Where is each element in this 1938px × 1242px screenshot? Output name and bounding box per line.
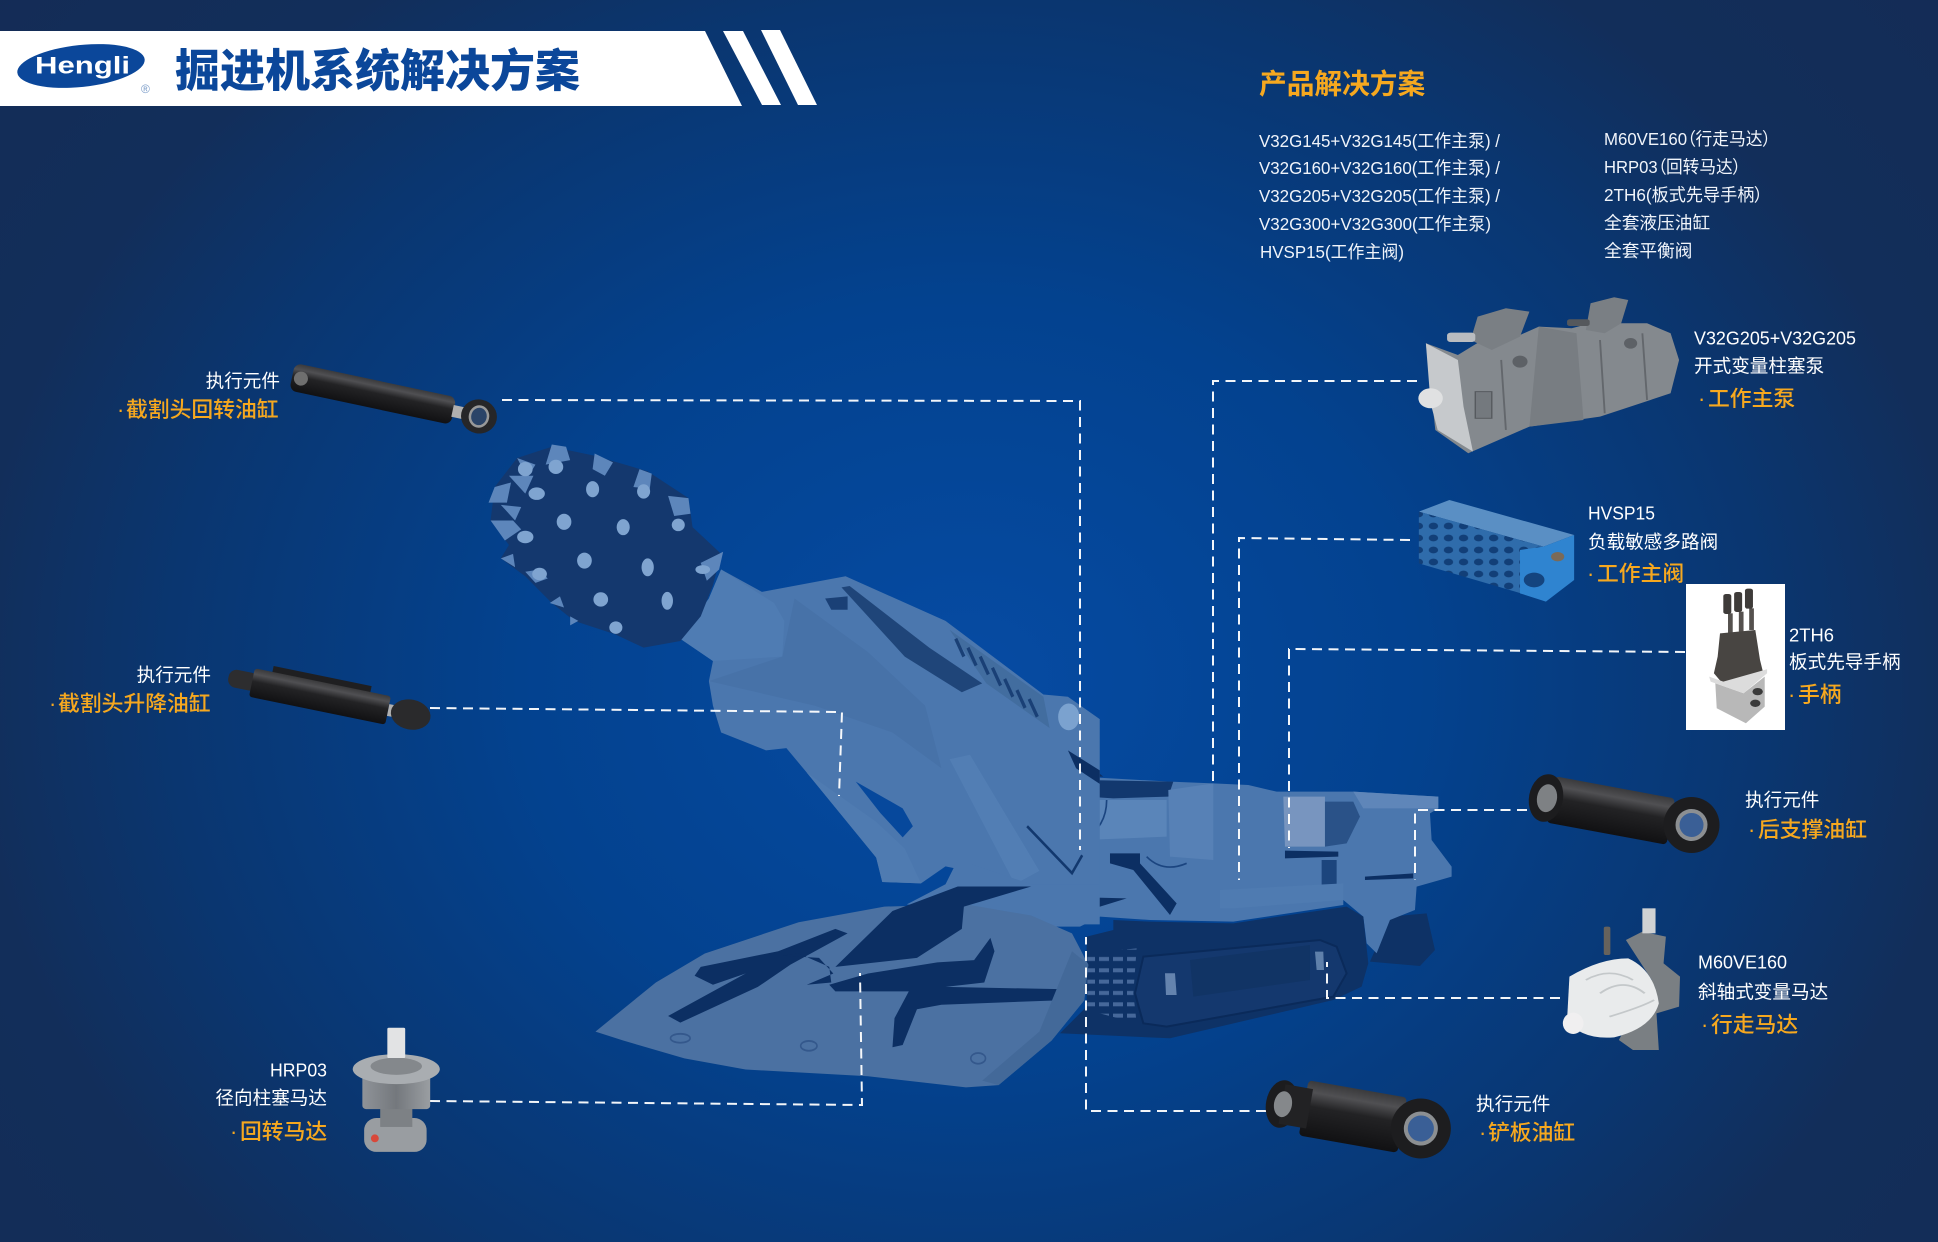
machine: boom [680,570,1100,924]
label: 手柄 [1798,682,1842,706]
label: · [1698,386,1705,410]
label [1745,790,1867,842]
header banner [0,30,817,106]
logo: Hengli: Hengli [35,52,130,80]
list: right column: M60VE160（行走马达） [1604,129,1771,149]
component: shovel plate cylinder [1261,1072,1575,1163]
list: right column: 2TH6(板式先导手柄） [1604,185,1763,205]
component: main pump V32G205 [1418,297,1856,453]
panel: product solutions [1259,68,1771,262]
list: right column: HRP03（回转马达） [1604,157,1741,177]
label: 工作主泵 [1708,386,1795,410]
machine: rear body and crawler [1000,750,1452,1038]
label: 径向柱塞马达 [215,1088,327,1108]
icon: twin piston pump [1418,297,1679,453]
list: left column [1259,131,1500,262]
component: rear support cylinder [1524,767,1867,858]
list: right column: 全套液压油缸 [1604,212,1710,233]
label [1694,328,1856,410]
logo: Hengli: ® [141,82,150,96]
logo: Hengli [15,38,150,96]
component: main valve HVSP15 [1419,500,1718,602]
label: HVSP15 [1588,502,1655,524]
label: 执行元件 [1745,790,1819,810]
label: 2TH6 [1789,624,1834,646]
label: 执行元件 [206,370,280,392]
label: 执行元件 [1476,1094,1550,1114]
label: · [1748,816,1755,842]
label: 回转马达 [240,1118,327,1144]
label: · [1587,560,1594,586]
machine: shovel plate [595,886,1088,1087]
list: right column: 全套平衡阀 [1604,241,1692,261]
icon: cylinder [1261,1072,1456,1163]
icon: pilot handle on white card [1686,584,1785,730]
icon: multi-way valve [1419,500,1574,602]
icon: radial piston motor [353,1028,440,1152]
label: 板式先导手柄 [1789,652,1901,672]
label [1788,624,1901,706]
label [1698,952,1828,1036]
label [215,1060,327,1144]
component: cutter head slewing cylinder [117,360,500,437]
label: · [1788,682,1795,706]
label: 铲板油缸 [1488,1120,1575,1144]
label: 行走马达 [1711,1012,1798,1036]
label: 斜轴式变量马达 [1698,982,1828,1002]
label [49,664,211,716]
label: · [1479,1120,1486,1144]
heading: product solutions: 产品解决方案 [1259,68,1425,100]
title: 掘进机系统解决方案 [175,46,580,96]
label: 开式变量柱塞泵 [1694,356,1824,376]
label: · [49,690,56,716]
icon: cylinder [225,658,434,733]
component: pilot handle 2TH6 [1686,584,1901,730]
icon: cylinder [289,360,500,437]
label: 工作主阀 [1597,560,1684,586]
label: 执行元件 [137,664,211,686]
list: left column: V32G145+V32G145(工作主泵) / [1259,131,1500,151]
component: cutter head lift cylinder [49,658,434,733]
machine silhouette: roadheader [489,445,1452,1087]
list: left column: HVSP15(工作主阀) [1260,242,1404,262]
list: right column [1604,129,1771,261]
list: left column: V32G300+V32G300(工作主泵) [1259,214,1491,234]
label [1587,502,1718,586]
label: · [1701,1012,1708,1036]
banner slanted stripes [723,30,817,105]
label: M60VE160 [1698,952,1787,972]
component: travel motor M60VE160 [1563,908,1828,1050]
banner white band [0,31,742,106]
machine: cutter head [489,445,723,648]
label [1476,1094,1575,1144]
label: V32G205+V32G205 [1694,328,1856,348]
dashed connector lines [430,381,1685,1111]
icon: bent-axis motor [1563,908,1680,1050]
label: 后支撑油缸 [1758,816,1867,842]
label: 负载敏感多路阀 [1588,532,1718,552]
label: · [117,396,124,422]
icon: cylinder [1524,767,1724,858]
label [117,370,280,422]
list: left column: V32G205+V32G205(工作主泵) / [1259,186,1500,206]
label: 截割头升降油缸 [58,690,211,716]
label: · [230,1118,237,1144]
label: 截割头回转油缸 [126,396,279,422]
list: left column: V32G160+V32G160(工作主泵) / [1259,158,1500,178]
component: slewing motor HRP03 [215,1028,440,1152]
label: HRP03 [270,1060,327,1080]
